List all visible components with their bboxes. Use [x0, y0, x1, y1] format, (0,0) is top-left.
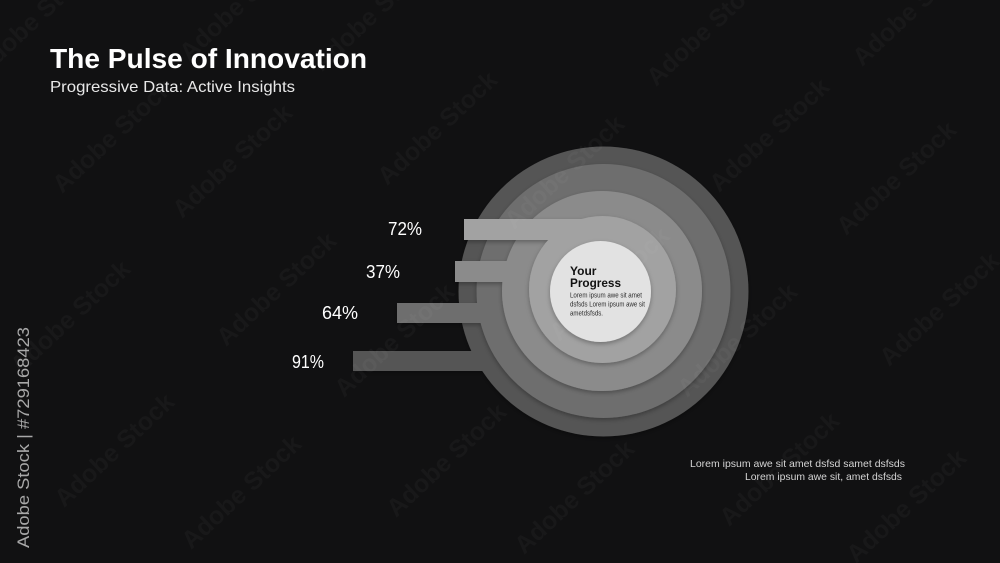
center heading: Progress — [570, 276, 621, 290]
label: 91%: 91% — [292, 352, 324, 372]
ring: third with 37% bar — [455, 191, 702, 391]
watermarks: Adobe Stock — [5, 255, 136, 379]
label: 64%: 64% — [322, 303, 358, 323]
subtitle: Progressive Data: Active Insights — [50, 79, 295, 96]
ring: second with 64% bar — [397, 164, 730, 418]
footnote text: Lorem ipsum awe sit amet dsfsd samet dsfsds — [690, 458, 905, 470]
chart: concentric progress rings with bars — [353, 146, 748, 436]
title: The Pulse of Innovation — [50, 43, 367, 74]
watermarks: Adobe Stock — [704, 73, 835, 197]
watermarks: Adobe Stock — [831, 116, 962, 240]
footnote text: Lorem ipsum awe sit, amet dsfsds — [745, 471, 902, 483]
watermarks: Adobe Stock — [49, 388, 180, 512]
watermarks: Adobe Stock — [544, 222, 675, 346]
center circle — [550, 241, 651, 342]
watermarks: Adobe Stock — [47, 74, 178, 198]
watermarks: Adobe Stock — [714, 407, 845, 531]
side stock id text: Adobe Stock | #729168423 — [14, 327, 33, 548]
center body text: ametdsfsds. — [570, 310, 603, 318]
watermarks: Adobe Stock — [372, 66, 503, 190]
center body text: Lorem ipsum awe sit amet — [570, 292, 642, 300]
center heading: Your — [570, 264, 597, 278]
watermarks: Adobe Stock — [329, 278, 460, 402]
watermarks: Adobe Stock — [509, 435, 640, 559]
watermarks: Adobe Stock — [672, 278, 803, 402]
ring: fourth with 72% bar — [464, 216, 676, 363]
label: 72%: 72% — [388, 219, 422, 239]
label: 37%: 37% — [366, 262, 400, 282]
watermarks: Adobe Stock — [176, 430, 307, 554]
watermarks: Adobe Stock — [211, 227, 342, 351]
ring: outer with 91% bar — [353, 146, 748, 436]
watermarks: Adobe Stock — [381, 398, 512, 522]
center body text: dsfsds Lorem ipsum awe sit — [570, 302, 645, 308]
watermarks: Adobe Stock — [167, 99, 298, 223]
watermarks: Adobe Stock — [499, 110, 630, 234]
